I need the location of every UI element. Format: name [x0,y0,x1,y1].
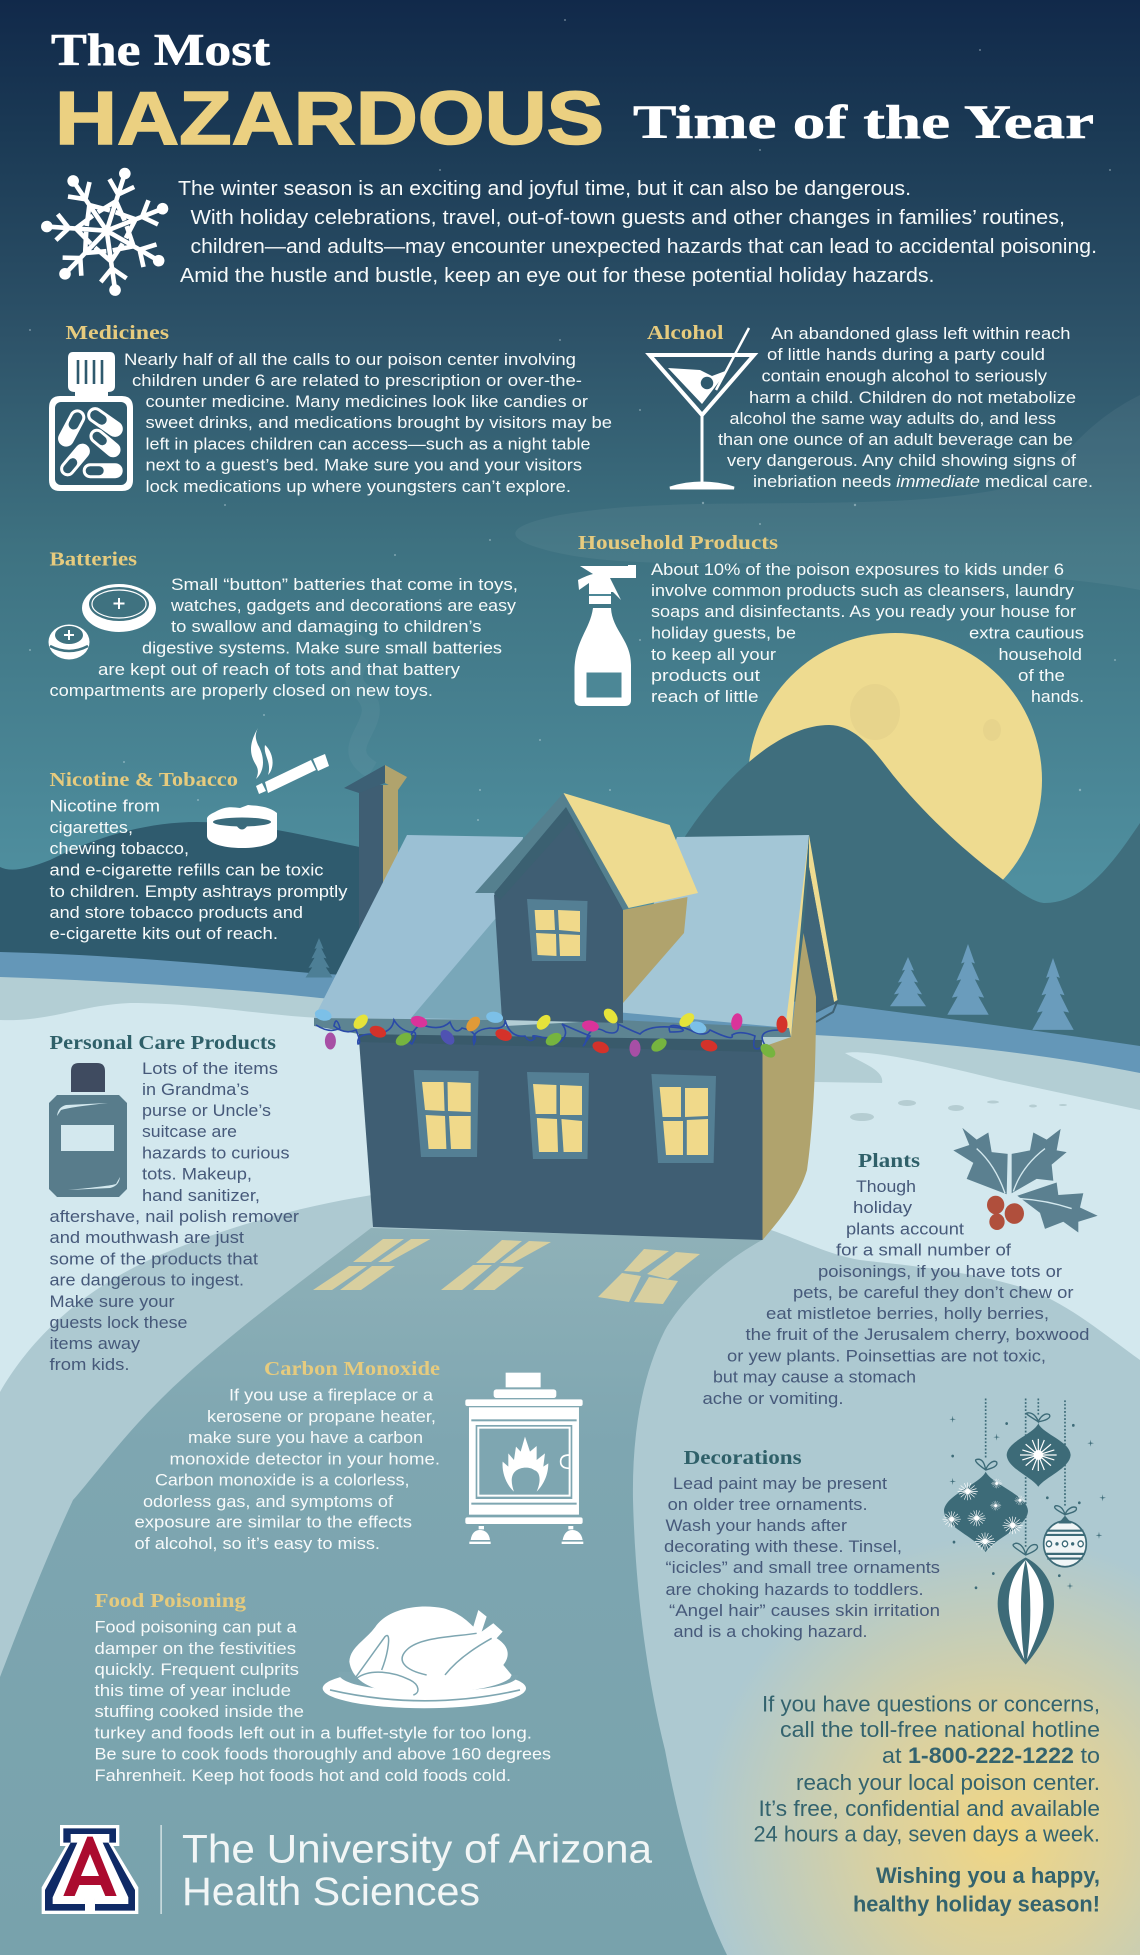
roof yellow trim [785,835,809,1037]
body text: household products: About 10% of the poison exposures to kids under 6 [651,560,1064,579]
chimney [344,765,407,965]
body text: plants [702,1177,1090,1408]
body text: personal care products: suitcase are [142,1122,237,1141]
body text: medicines: next to a guest’s bed. Make sure you and your visitors [146,456,582,474]
body text: household products: involve common products such as cleansers, laundry [651,581,1075,600]
left roof shadow [411,918,502,1020]
title: The Most [51,25,270,75]
body text: alcohol: harm a child. Children do not metabolize [749,388,1076,407]
body text: personal care products: and mouthwash are just [50,1228,244,1247]
title [51,25,1094,160]
body text: medicines: lock medications up where youngsters can’t explore. [146,477,571,496]
front wall [359,1040,762,1240]
body text: carbon monoxide [134,1386,440,1553]
foreground hill [0,1195,1140,1955]
icon: snowflake [40,164,173,298]
body text: medicines: Nearly half of all the calls to our poison center involving [124,350,576,369]
callout: hotline [754,1692,1100,1917]
body text: batteries: to swallow and damaging to children’s [171,617,482,636]
heading: medicines: Medicines [66,322,169,344]
body text: alcohol: of little hands during a party could [767,345,1045,364]
eaves [314,1018,791,1052]
body text: food poisoning: turkey and foods left out in a buffet-style for too long. [94,1724,532,1742]
body text: nicotine and tobacco: and store tobacco products and [50,903,303,922]
body text: nicotine and tobacco: and e-cigarette refills can be toxic [50,860,324,880]
dormer yellow roof [564,793,698,908]
body text: medicines: children under 6 are related to prescription or over-the- [132,371,582,390]
body text: plants: for a small number of [836,1240,1011,1260]
body text: personal care products: items away [50,1334,141,1353]
body text: personal care products: aftershave, nail polish remover [50,1207,299,1226]
body text: plants: the fruit of the Jerusalem cherry, boxwood [746,1325,1090,1344]
body text: household products: holiday guests, be [651,624,796,642]
sky wisps and chimney smoke [350,395,1140,770]
body text: plants: Though [856,1177,916,1196]
icon: martini glass [650,328,754,488]
body text: plants: eat mistletoe berries, holly berries, [766,1304,1049,1323]
callout: hotline: It’s free, confidential and available [758,1796,1100,1821]
footprints in the snow [850,1100,1067,1121]
body text: household products: to keep all your [651,645,776,664]
body text: plants: or yew plants. Poinsettias are not toxic, [727,1346,1046,1366]
body text: household products: of the [1018,666,1065,685]
stars [29,19,1116,821]
body text: personal care products: are dangerous to ingest. [50,1270,244,1290]
body text: personal care products: purse or Uncle’s [142,1101,271,1120]
body text: plants: poisonings, if you have tots or [818,1262,1062,1281]
callout: hotline: call the toll-free national hotline [780,1717,1100,1742]
panel: nicotine and tobacco [50,728,348,943]
icon: pill bottle [49,352,133,491]
body text: medicines: counter medicine. Many medicines look like candies or [146,392,588,411]
body text: household products: reach of little [651,687,758,706]
icon: ornaments [942,1399,1106,1665]
body text: nicotine and tobacco: to children. Empty ashtrays promptly [50,882,348,901]
icon: roast turkey [323,1606,526,1708]
icon: cigarette and ashtray [207,728,329,848]
icon: wood stove [465,1373,583,1544]
body text: nicotine and tobacco: Nicotine from [50,797,160,816]
body text: alcohol [718,324,1093,491]
body text: food poisoning: quickly. Frequent culprits [94,1660,299,1679]
body text: personal care products: hazards to curious [142,1144,290,1162]
dormer window [527,899,588,961]
body text: batteries: are kept out of reach of tots and that battery [98,660,461,679]
house [314,765,837,1240]
body text: food poisoning: Food poisoning can put a [94,1618,297,1637]
body text: alcohol: very dangerous. Any child showing signs of [727,451,1076,470]
front window middle [527,1072,589,1159]
title: HAZARDOUS [55,76,604,160]
body text: household products: soaps and disinfectants. As you ready your house for [651,602,1076,621]
body text: food poisoning: Be sure to cook foods thoroughly and above 160 degrees [94,1744,551,1764]
front window left [414,1070,479,1157]
callout: hotline: healthy holiday season! [853,1892,1100,1917]
heading: food poisoning: Food Poisoning [94,1590,247,1612]
body text: personal care products [50,1059,299,1374]
snowy road [0,1228,764,1955]
body text: plants: ache or vomiting. [702,1389,844,1408]
heading: decorations: Decorations [684,1447,802,1469]
callout: hotline: reach your local poison center. [796,1770,1100,1795]
heading: household products: Household Products [578,532,778,554]
panel: household products [574,532,1084,706]
panel: decorations [664,1399,1106,1665]
body text: food poisoning: Fahrenheit. Keep hot foods hot and cold foods cold. [94,1766,511,1785]
body text: carbon monoxide: monoxide detector in your home. [170,1450,440,1468]
body text: decorations: “icicles” and small tree ornaments [666,1558,940,1577]
right roof [616,835,809,1028]
body text: carbon monoxide: Carbon monoxide is a colorless, [155,1470,410,1490]
body text: batteries: compartments are properly closed on new toys. [50,681,433,700]
body text: personal care products: guests lock these [50,1313,188,1332]
body text: decorations: and is a choking hazard. [674,1622,868,1641]
icon: holly [953,1128,1098,1232]
right gable [803,835,838,1022]
logo: block A [42,1825,138,1914]
body text: medicines: sweet drinks, and medications brought by visitors may be [146,413,612,432]
left roof [314,835,523,1020]
panel: batteries [48,549,518,700]
body text: personal care products: hand sanitizer, [142,1186,260,1205]
heading: alcohol: Alcohol [647,322,724,344]
panel: personal care products [49,1032,299,1374]
body text: decorations: on older tree ornaments. [668,1495,868,1514]
intro text: The winter season is an exciting and joyful time, but it can also be dangerous. [178,178,911,200]
logo: university name [182,1828,653,1914]
left hill [0,822,420,1000]
intro text: With holiday celebrations, travel, out-of-town guests and other changes in families’ routines, [190,207,1065,229]
holiday lights [314,1006,788,1060]
intro text: Amid the hustle and bustle, keep an eye out for these potential holiday hazards. [180,265,934,287]
panel: food poisoning [94,1590,551,1785]
heading: plants: Plants [858,1150,920,1172]
heading: carbon monoxide: Carbon Monoxide [264,1358,440,1380]
callout: hotline: 24 hours a day, seven days a week. [754,1822,1100,1847]
heading: personal care products: Personal Care Products [50,1032,276,1054]
body text: food poisoning: this time of year include [94,1681,291,1700]
front window right [651,1074,716,1163]
title: Time of the Year [633,96,1094,149]
body text: decorations: “Angel hair” causes skin irritation [669,1601,940,1620]
heading: nicotine and tobacco: Nicotine & Tobacco [50,769,238,791]
body text: plants: holiday [853,1198,913,1217]
body text: carbon monoxide: If you use a fireplace or a [229,1386,434,1405]
body text: nicotine and tobacco: cigarettes, [50,818,133,837]
body text: personal care products: in Grandma’s [142,1080,249,1099]
dormer wall [494,813,623,1023]
body text: carbon monoxide: kerosene or propane heater, [207,1407,436,1426]
body text: decorations [664,1474,940,1641]
body text: food poisoning: damper on the festivities [94,1639,296,1658]
icon: mouthwash bottle [49,1063,127,1197]
body text: nicotine and tobacco: chewing tobacco, [50,839,189,858]
body text: plants: but may cause a stomach [713,1368,916,1386]
panel: medicines [49,322,612,496]
body text: plants: pets, be careful they don’t chew or [793,1283,1074,1302]
body text: decorations: Lead paint may be present [673,1474,887,1493]
body text: medicines: left in places children can access—such as a night table [146,434,590,454]
callout: hotline: Wishing you a happy, [876,1863,1100,1888]
body text: food poisoning: stuffing cooked inside the [94,1702,304,1721]
body text: alcohol: than one ounce of an adult beverage can be [718,430,1073,449]
mountains [660,725,1140,1100]
body text: nicotine and tobacco [50,797,348,943]
body text: personal care products: some of the products that [50,1250,258,1268]
dormer fascia [475,793,629,910]
intro text [178,178,1097,287]
moon [748,633,1042,927]
panel: carbon monoxide [134,1358,583,1553]
intro text: children—and adults—may encounter unexpected hazards that can lead to accidental poisoning. [190,236,1097,258]
logo: divider [160,1825,162,1914]
callout: hotline: If you have questions or concerns, [762,1692,1100,1717]
body text: carbon monoxide: make sure you have a carbon [188,1428,423,1447]
icon: spray bottle [574,565,636,706]
hotline glow [630,1530,1140,1955]
logo: university name: The University of Arizona [182,1828,653,1872]
side wall [762,933,816,1240]
logo: university name: Health Sciences [182,1870,480,1914]
dormer side [623,897,688,1003]
body text: decorations: decorating with these. Tinsel, [664,1537,902,1556]
body text: decorations: Wash your hands after [666,1516,847,1535]
body text: carbon monoxide: of alcohol, so it’s easy to miss. [134,1534,380,1553]
body text: alcohol: alcohol the same way adults do, and less [730,409,1056,428]
body text: carbon monoxide: exposure are similar to the effects [134,1512,412,1532]
body text: alcohol: An abandoned glass left within reach [771,324,1070,343]
body text: personal care products: Make sure your [50,1292,175,1311]
panel: plants [702,1128,1098,1408]
body text: medicines [124,350,612,496]
body text: food poisoning [94,1618,551,1785]
panel: alcohol [647,322,1093,491]
icon: button batteries [48,584,156,660]
callout: hotline: at 1-800-222-1222 to [882,1743,1100,1768]
body text: nicotine and tobacco: e-cigarette kits out of reach. [50,924,278,943]
body text: plants: plants account [846,1220,964,1238]
body text: batteries [50,575,518,700]
body text: personal care products: Lots of the items [142,1059,278,1078]
body text: batteries: Small “button” batteries that come in toys, [171,575,518,594]
body text: batteries: watches, gadgets and decorations are easy [170,596,517,615]
body text: household products: household [998,645,1082,664]
body text: carbon monoxide: odorless gas, and symptoms of [143,1492,393,1511]
body text: household products: extra cautious [969,624,1084,642]
tree line and snowfields [0,938,1140,1955]
body text: batteries: digestive systems. Make sure small batteries [142,638,502,658]
body text: personal care products: tots. Makeup, [142,1164,252,1184]
body text: alcohol: contain enough alcohol to seriously [762,366,1048,386]
window light on the road [313,1239,700,1304]
body text: household products [651,560,1084,706]
body text: household products: hands. [1031,687,1084,706]
body text: alcohol: inebriation needs immediate medical care. [753,472,1093,491]
body text: personal care products: from kids. [50,1355,130,1374]
body text: decorations: are choking hazards to toddlers. [666,1580,924,1599]
body text: household products: products out [651,666,760,685]
heading: batteries: Batteries [50,549,137,571]
